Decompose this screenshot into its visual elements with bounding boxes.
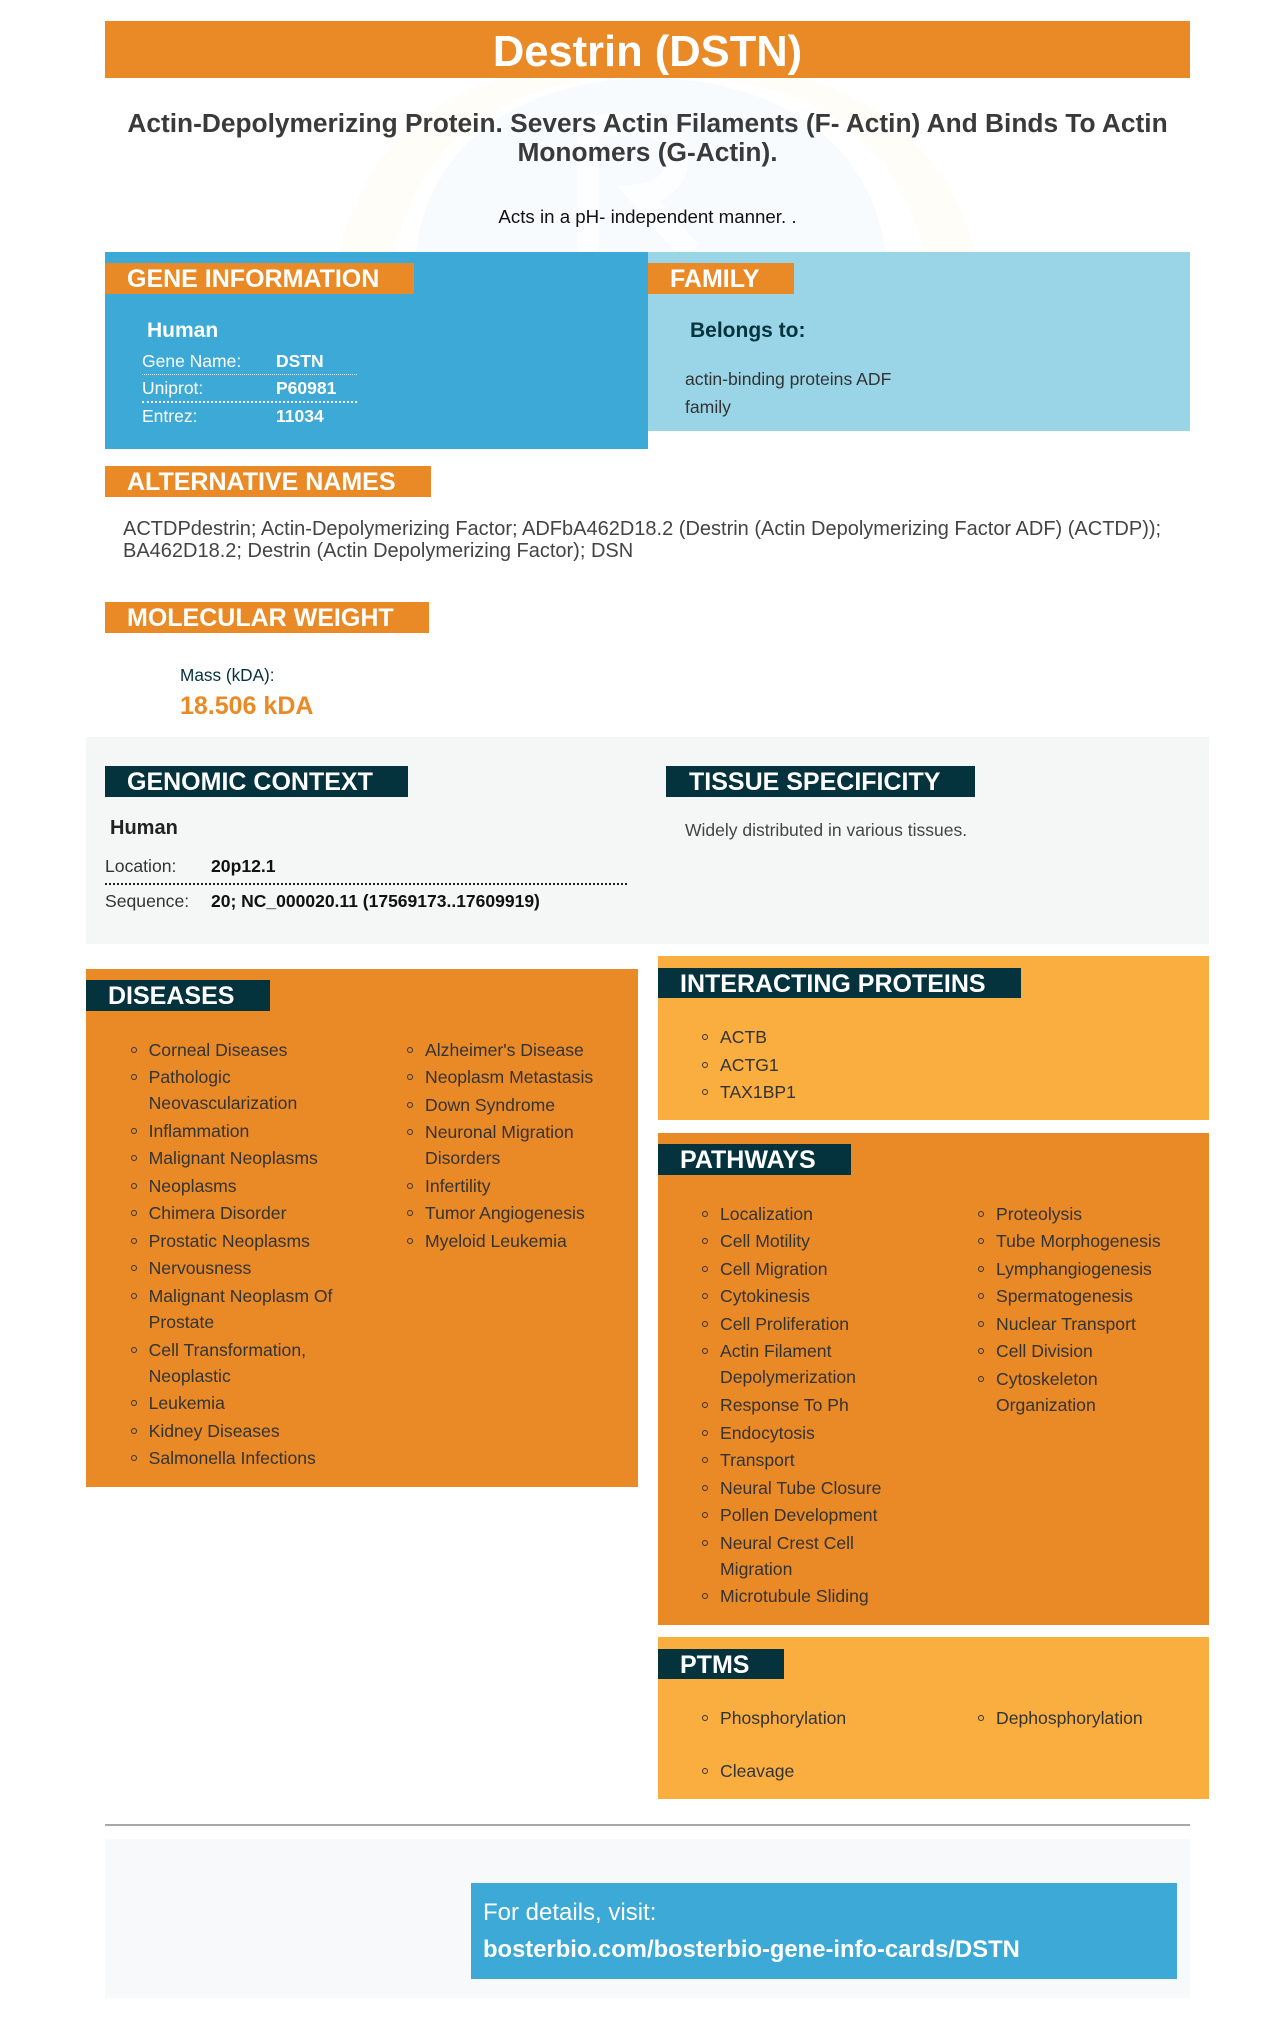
disease list column 1: Corneal Diseases <box>149 1040 287 1060</box>
pathways list column 1: Cytokinesis <box>720 1286 810 1306</box>
pathways list column 1 <box>702 1204 881 1606</box>
heading: family: FAMILY <box>670 265 759 293</box>
disease list column 1: Kidney Diseases <box>149 1421 280 1441</box>
pathways list column 2: Nuclear Transport <box>996 1314 1136 1334</box>
pathways list column 1: Cell Motility <box>720 1231 810 1251</box>
disease list column 2: Infertility <box>425 1176 491 1196</box>
panel: genomic context and tissue specificity <box>86 737 1209 944</box>
pathways list column 2: Spermatogenesis <box>996 1286 1133 1306</box>
disease list column 1: Chimera Disorder <box>149 1203 286 1223</box>
pathways list column 1: Neural Tube Closure <box>720 1478 881 1498</box>
interacting proteins list: ACTB <box>720 1027 767 1047</box>
disease list column 2: Neuronal Migration <box>425 1122 574 1142</box>
disease list column 1: Cell Transformation, <box>149 1340 306 1360</box>
gene name row: DSTN <box>276 351 324 371</box>
belongs to label: Belongs to: <box>690 319 806 342</box>
disease list column 2: Myeloid Leukemia <box>425 1231 567 1251</box>
disease list column 1: Prostatic Neoplasms <box>149 1231 310 1251</box>
callout: details link <box>471 1883 1177 1979</box>
pathways list column 1: Depolymerization <box>720 1367 856 1387</box>
ptms list <box>702 1708 1143 1781</box>
pathways list column 2: Cell Division <box>996 1341 1093 1361</box>
pathways list column 1: Cell Migration <box>720 1259 828 1279</box>
species label: Human <box>147 319 218 342</box>
uniprot row <box>142 378 336 398</box>
heading: pathways <box>658 1144 851 1175</box>
entrez row: 11034 <box>276 406 324 426</box>
callout label: For details, visit: <box>483 1899 656 1926</box>
interacting proteins list: TAX1BP1 <box>720 1082 796 1102</box>
description: Acts in a pH- independent manner. . <box>498 206 797 227</box>
mass value: 18.506 kDA <box>180 692 313 720</box>
heading: alternative names: ALTERNATIVE NAMES <box>127 468 396 496</box>
location row: 20p12.1 <box>211 856 276 876</box>
disease list column 1: Neoplastic <box>149 1366 231 1386</box>
disease list column 1: Neoplasms <box>149 1176 237 1196</box>
pathways list column 1: Migration <box>720 1559 792 1579</box>
pathways list column 2: Cytoskeleton <box>996 1369 1098 1389</box>
alternative names text: BA462D18.2; Destrin (Actin Depolymerizing Factor); DSN <box>123 540 633 562</box>
heading: family <box>648 263 794 294</box>
heading: tissue specificity: TISSUE SPECIFICITY <box>689 768 940 796</box>
panel: pathways <box>658 1133 1209 1625</box>
title banner <box>105 21 1190 78</box>
pathways list column 2: Lymphangiogenesis <box>996 1259 1152 1279</box>
pathways list column 1: Cell Proliferation <box>720 1314 849 1334</box>
entrez row <box>142 406 324 426</box>
panel: interacting proteins <box>658 956 1209 1120</box>
interacting proteins list: ACTG1 <box>720 1055 779 1075</box>
sequence row: 20; NC_000020.11 (17569173..17609919) <box>211 891 540 911</box>
heading: ptms: PTMS <box>680 1651 749 1679</box>
heading: molecular weight: MOLECULAR WEIGHT <box>127 604 394 632</box>
species label: Human <box>110 817 178 839</box>
heading: diseases <box>86 980 270 1011</box>
panel: family <box>648 252 1190 431</box>
pathways list column 1: Microtubule Sliding <box>720 1586 869 1606</box>
pathways list column 1: Transport <box>720 1450 795 1470</box>
title banner: Destrin (DSTN) <box>493 28 802 76</box>
gene name row: Gene Name: <box>142 351 241 371</box>
pathways list column 1: Neural Crest Cell <box>720 1533 854 1553</box>
pathways list column 2: Proteolysis <box>996 1204 1082 1224</box>
callout url: bosterbio.com/bosterbio-gene-info-cards/DSTN <box>483 1936 1020 1963</box>
disease list column 1: Inflammation <box>149 1121 249 1141</box>
location row <box>105 856 276 876</box>
tissue text: Widely distributed in various tissues. <box>685 820 967 840</box>
pathways list column 1: Actin Filament <box>720 1341 831 1361</box>
gene name row <box>142 351 324 371</box>
disease list column 2 <box>407 1040 593 1251</box>
panel: gene information <box>105 252 648 449</box>
ptms list: Phosphorylation <box>720 1708 846 1728</box>
panel: footer <box>105 1839 1190 1998</box>
family text <box>685 369 891 417</box>
heading: ptms <box>658 1649 784 1679</box>
panel: diseases <box>86 969 638 1487</box>
uniprot row: P60981 <box>276 378 336 398</box>
ptms list: Cleavage <box>720 1761 794 1781</box>
disease list column 1 <box>131 1040 332 1468</box>
pathways list column 2 <box>978 1204 1161 1415</box>
pathways list column 1: Response To Ph <box>720 1395 849 1415</box>
subtitle: Monomers (G-Actin). <box>517 137 778 167</box>
interacting proteins list <box>702 1027 796 1102</box>
disease list column 1: Malignant Neoplasm Of <box>149 1286 332 1306</box>
heading: pathways: PATHWAYS <box>680 1146 816 1174</box>
mass label: Mass (kDA): <box>180 665 275 685</box>
heading: diseases: DISEASES <box>108 982 234 1010</box>
ptms list: Dephosphorylation <box>996 1708 1143 1728</box>
disease list column 1: Neovascularization <box>149 1093 297 1113</box>
subtitle: Actin-Depolymerizing Protein. Severs Actin Filaments (F- Actin) And Binds To Actin <box>127 108 1168 138</box>
subtitle <box>127 108 1168 167</box>
family text: actin-binding proteins ADF <box>685 369 891 389</box>
alternative names text: ACTDPdestrin; Actin-Depolymerizing Factor; ADFbA462D18.2 (Destrin (Actin Depolymerizing Factor ADF) (ACTDP)); <box>123 518 1161 540</box>
uniprot row: Uniprot: <box>142 378 203 398</box>
disease list column 1: Pathologic <box>149 1067 231 1087</box>
disease list column 1: Malignant Neoplasms <box>149 1148 318 1168</box>
family text: family <box>685 397 731 417</box>
disease list column 1: Prostate <box>149 1312 214 1332</box>
entrez row: Entrez: <box>142 406 197 426</box>
location row: Location: <box>105 856 176 876</box>
pathways list column 1: Endocytosis <box>720 1423 815 1443</box>
heading: interacting proteins: INTERACTING PROTEINS <box>680 970 986 998</box>
sequence row: Sequence: <box>105 891 189 911</box>
disease list column 1: Nervousness <box>149 1258 251 1278</box>
disease list column 2: Tumor Angiogenesis <box>425 1203 585 1223</box>
alternative names text <box>123 518 1161 562</box>
pathways list column 2: Organization <box>996 1395 1096 1415</box>
panel: ptms <box>658 1637 1209 1799</box>
disease list column 2: Disorders <box>425 1148 500 1168</box>
watermark logo <box>0 0 1288 260</box>
pathways list column 2: Tube Morphogenesis <box>996 1231 1161 1251</box>
disease list column 2: Neoplasm Metastasis <box>425 1067 593 1087</box>
heading: gene information: GENE INFORMATION <box>127 265 379 293</box>
heading: genomic context: GENOMIC CONTEXT <box>127 768 373 796</box>
disease list column 2: Down Syndrome <box>425 1095 555 1115</box>
disease list column 1: Leukemia <box>149 1393 225 1413</box>
pathways list column 1: Localization <box>720 1204 813 1224</box>
panel: diseases: Salmonella Infections <box>149 1448 316 1468</box>
pathways list column 1: Pollen Development <box>720 1505 877 1525</box>
disease list column 2: Alzheimer's Disease <box>425 1040 584 1060</box>
